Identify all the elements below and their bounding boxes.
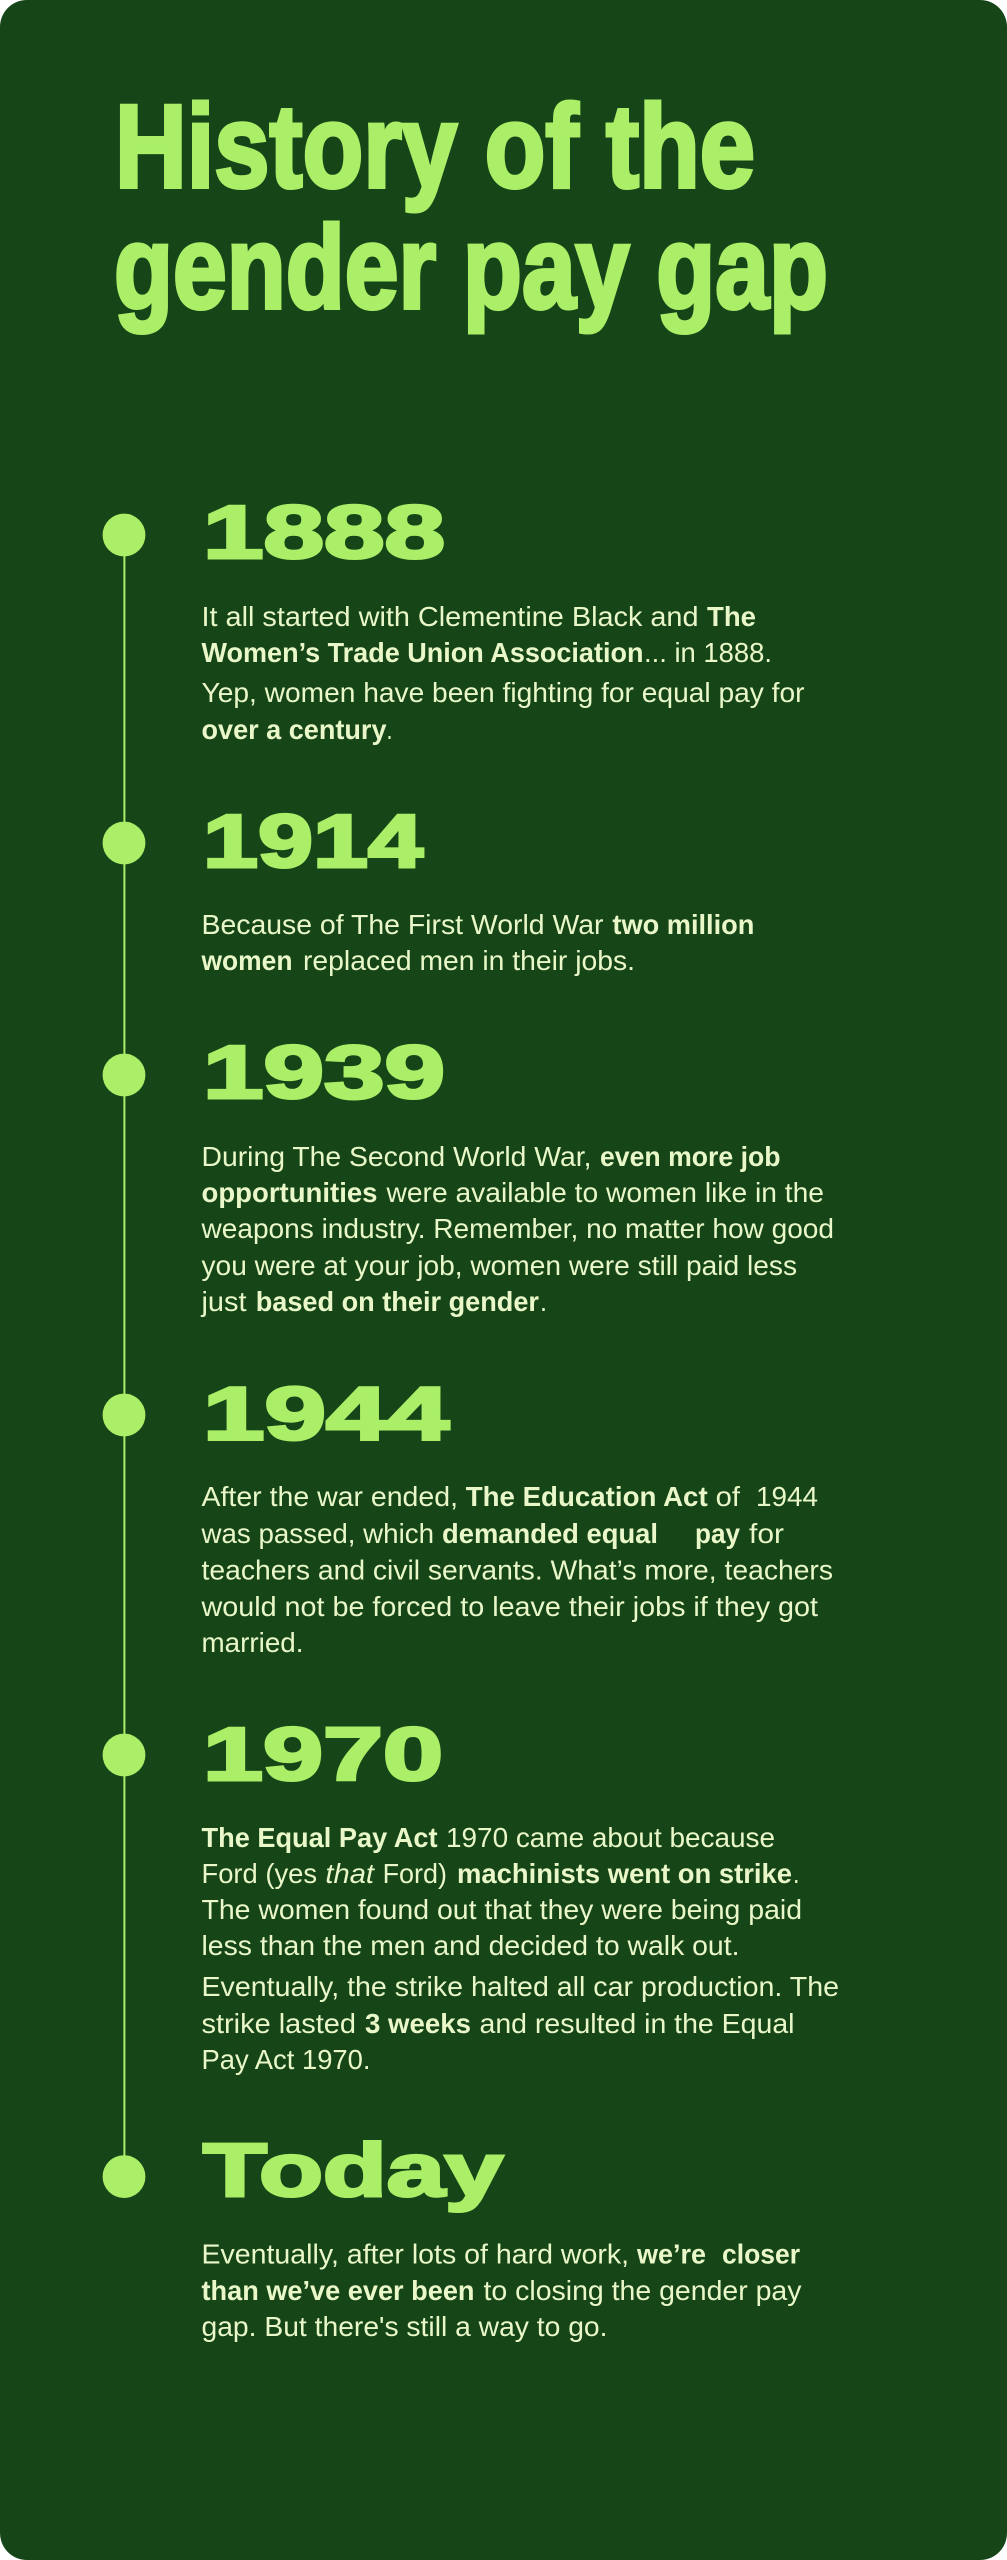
timeline entry: Today (103, 2128, 802, 2342)
text block: 1939 description: even more job (600, 1141, 780, 1172)
text block: Today description: Eventually, after lots of hard work, (202, 2238, 629, 2270)
text block: 1914 description: Because of The First World War (202, 909, 604, 940)
text block: 1939 description (200, 1141, 834, 1317)
text block: 1970 description: . (793, 1858, 800, 1889)
text block: 1944 description: of (716, 1481, 740, 1512)
text block: Today description: we’re (636, 2238, 706, 2270)
text block: 1944 description: would not be forced to leave their jobs if they got (200, 1591, 818, 1622)
icon: timeline dot Today (103, 2155, 145, 2198)
text block: 1944 description: married. (202, 1627, 304, 1658)
title (114, 81, 828, 334)
text block: 1939 description: During The Second World War, (202, 1141, 592, 1172)
icon: timeline dot 1888 (103, 514, 145, 556)
timeline vertical line (123, 535, 125, 2177)
timeline entry: 1939 (103, 1030, 834, 1317)
text block: 1970 description: Ford) (383, 1858, 447, 1889)
text block: 1970 description: strike lasted (202, 2008, 356, 2039)
text block: 1888 description (202, 601, 804, 745)
text block: 1939 description: weapons industry. Remember, no matter how good (200, 1213, 834, 1244)
timeline entry: 1944 (103, 1372, 833, 1658)
text block: Today description (202, 2238, 802, 2342)
text block: 1888 description: It all started with Clementine Black and (202, 601, 698, 632)
text block: 1970 description: and resulted in the Equal (480, 2008, 794, 2039)
heading: 1914: 1914 (203, 799, 423, 883)
text block: Today description: gap. But there's still a way to go. (202, 2311, 608, 2342)
heading: 1939: 1939 (203, 1030, 445, 1114)
text block: 1914 description: replaced men in their jobs. (303, 945, 635, 976)
text block: 1914 description (201, 909, 754, 976)
text block: 1944 description: for (749, 1518, 784, 1549)
text block: 1970 description: 1970 came about because (446, 1822, 775, 1853)
text block: 1888 description: Yep, women have been fighting for equal pay for (202, 677, 804, 708)
text block: 1970 description: less than the men and decided to walk out. (202, 1930, 740, 1961)
text block: 1944 description: demanded equal (442, 1518, 658, 1549)
title: gender pay gap (114, 202, 828, 334)
text block: 1888 description: . (386, 714, 392, 745)
text block: 1970 description: Pay Act 1970. (202, 2044, 370, 2075)
heading: 1944: 1944 (203, 1372, 449, 1456)
text block: Today description: than we’ve ever been (202, 2275, 474, 2306)
text block: 1944 description (200, 1481, 833, 1658)
timeline entry: 1914 (103, 799, 754, 976)
text block: 1914 description: women (201, 945, 292, 976)
heading: Today: Today (203, 2128, 503, 2212)
text block: 1939 description: based on their gender (256, 1286, 539, 1317)
text block: 1888 description: ... in 1888. (644, 637, 772, 668)
text block: 1970 description: Ford (yes (202, 1858, 317, 1889)
text block: 1970 description: 3 weeks (365, 2008, 471, 2039)
title: History of the (115, 81, 755, 213)
text block: 1888 description: over a century (202, 714, 387, 745)
text block: 1939 description: were available to women like in the (385, 1177, 824, 1208)
icon: timeline dot 1944 (103, 1394, 145, 1436)
text block: 1939 description: opportunities (202, 1177, 378, 1208)
icon: timeline dot 1970 (103, 1734, 145, 1776)
text block: 1888 description: The (707, 601, 756, 632)
text block: 1939 description: . (540, 1286, 547, 1317)
text block: 1970 description: Eventually, the strike halted all car production. The (202, 1971, 839, 2002)
text block: 1944 description: pay (695, 1518, 740, 1549)
text block: 1944 description: was passed, which (201, 1518, 434, 1549)
heading: 1970: 1970 (203, 1712, 443, 1796)
text block: Today description: to closing the gender pay (484, 2275, 802, 2306)
text block: 1944 description: teachers and civil servants. What’s more, teachers (202, 1554, 833, 1586)
text block: 1944 description: After the war ended, (202, 1481, 458, 1512)
text block: 1888 description: Women’s Trade Union Association (202, 637, 644, 668)
text block: 1970 description: The women found out that they were being paid (202, 1894, 802, 1925)
text block: Today description: closer (722, 2238, 800, 2270)
text block: 1970 description: The Equal Pay Act (202, 1822, 438, 1853)
text block: 1944 description: 1944 (756, 1481, 818, 1512)
timeline entry: 1888 (103, 490, 805, 745)
icon: timeline dot 1914 (103, 822, 145, 864)
text block: 1939 description: you were at your job, women were still paid less (202, 1250, 797, 1281)
timeline entry: 1970 (103, 1712, 839, 2075)
icon: timeline dot 1939 (103, 1054, 145, 1096)
text block: 1939 description: just (200, 1286, 247, 1317)
text block: 1914 description: two million (612, 909, 754, 940)
text block: 1970 description: that (325, 1858, 375, 1889)
text block: 1970 description (202, 1822, 839, 2075)
heading: 1888: 1888 (203, 490, 445, 574)
text block: 1970 description: machinists went on strike (457, 1858, 792, 1889)
text block: 1944 description: The Education Act (466, 1481, 708, 1512)
